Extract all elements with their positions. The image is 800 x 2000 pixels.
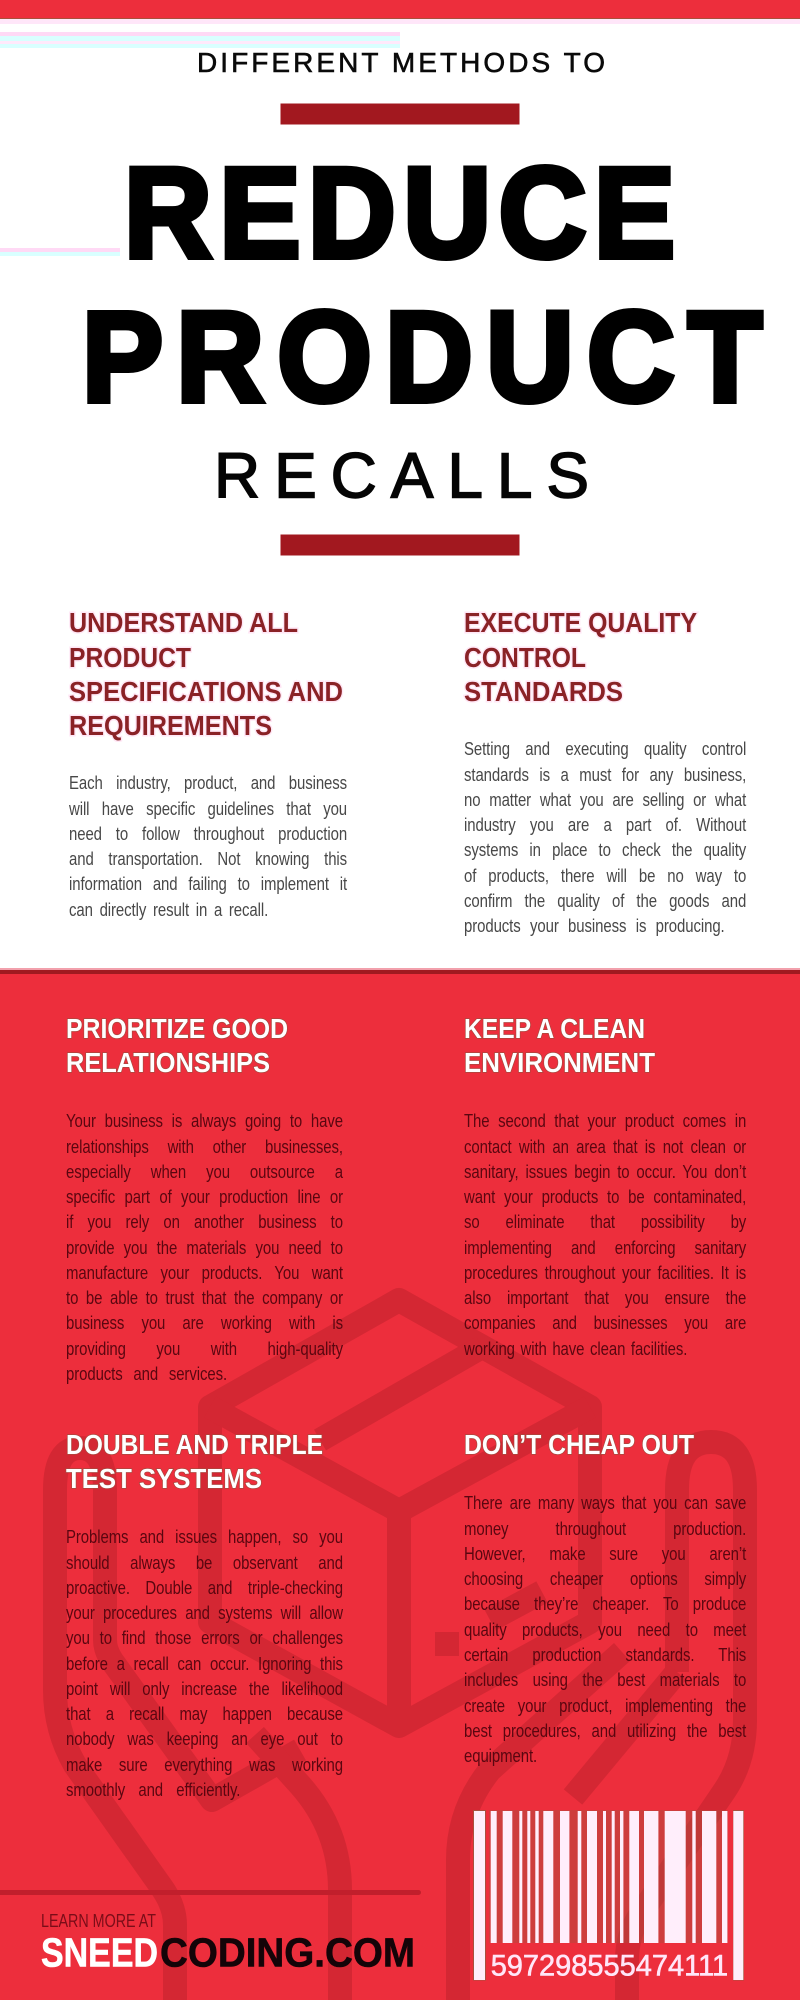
text block bbox=[66, 1527, 344, 1800]
text block: if you rely on another business to bbox=[66, 1212, 343, 1232]
title line: product: PRODUCT bbox=[82, 286, 762, 429]
panel: double and triple test systems bbox=[66, 1429, 344, 1800]
heading: DON’T CHEAP OUT bbox=[464, 1429, 694, 1460]
header artefact stripes bbox=[0, 32, 400, 256]
barcode number: 597298555474111 bbox=[491, 1950, 728, 1983]
text block: before a recall can occur. Ignoring this bbox=[66, 1654, 343, 1674]
heading bbox=[66, 1013, 288, 1078]
text block: There are many ways that you can save bbox=[464, 1493, 746, 1513]
panel: keep a clean environment bbox=[464, 1013, 746, 1359]
text block: provide you the materials you need to bbox=[66, 1238, 343, 1258]
section divider bbox=[0, 968, 800, 974]
text block: nobody was keeping an eye out to bbox=[66, 1729, 343, 1749]
top red band bbox=[0, 0, 800, 19]
heading: UNDERSTAND ALL bbox=[69, 607, 298, 638]
text block: can directly result in a recall. bbox=[69, 900, 268, 920]
text block: equipment. bbox=[464, 1746, 537, 1766]
text block: no matter what you are selling or what bbox=[464, 790, 746, 810]
heading: EXECUTE QUALITY bbox=[464, 607, 697, 638]
heading: RELATIONSHIPS bbox=[66, 1047, 270, 1078]
divider bottom bbox=[280, 534, 520, 556]
text block: make sure everything was working bbox=[66, 1755, 343, 1775]
heading: STANDARDS bbox=[464, 676, 623, 707]
text block bbox=[464, 739, 746, 936]
heading: REQUIREMENTS bbox=[69, 710, 272, 741]
heading: SPECIFICATIONS AND bbox=[69, 676, 343, 707]
text block: information and failing to implement it bbox=[69, 874, 347, 894]
text block: and transportation. Not knowing this bbox=[69, 849, 347, 869]
divider top bbox=[280, 104, 520, 124]
text block: need to follow throughout production bbox=[69, 824, 347, 844]
text block: create your product, implementing the bbox=[464, 1696, 746, 1716]
heading: DOUBLE AND TRIPLE bbox=[66, 1429, 323, 1460]
text block: Each industry, product, and business bbox=[69, 773, 347, 793]
text block: smoothly and efficiently. bbox=[66, 1780, 240, 1800]
text block: products and services. bbox=[66, 1364, 227, 1384]
text block: should always be observant and bbox=[66, 1553, 343, 1573]
text block: companies and businesses you are bbox=[464, 1313, 746, 1333]
footer: learn more bbox=[41, 1911, 415, 1976]
website: sneed: SNEED bbox=[41, 1930, 158, 1976]
heading: TEST SYSTEMS bbox=[66, 1463, 262, 1494]
panel: prioritize good relationships bbox=[66, 1013, 344, 1384]
text block: also important that you ensure the bbox=[464, 1288, 746, 1308]
text block: standards is a must for any business, bbox=[464, 765, 746, 785]
text block bbox=[69, 773, 348, 920]
text block: implementing and enforcing sanitary bbox=[464, 1238, 746, 1258]
text block bbox=[464, 1111, 746, 1359]
text block: working with have clean facilities. bbox=[464, 1339, 687, 1359]
text block: so eliminate that possibility by bbox=[464, 1212, 746, 1232]
text block: of products, there will be no way to bbox=[464, 866, 746, 886]
footer rule bbox=[0, 1890, 421, 1895]
heading bbox=[464, 1013, 656, 1078]
text block: you to find those errors or challenges bbox=[66, 1628, 343, 1648]
text block: want your products to be contaminated, bbox=[464, 1187, 746, 1207]
text block: Problems and issues happen, so you bbox=[66, 1527, 343, 1547]
text block: providing you with high-quality bbox=[66, 1339, 343, 1359]
text block: However, make sure you aren’t bbox=[464, 1544, 746, 1564]
heading: KEEP A CLEAN bbox=[464, 1013, 645, 1044]
title line: different methods to: DIFFERENT METHODS TO bbox=[197, 47, 605, 78]
text block: Setting and executing quality control bbox=[464, 739, 746, 759]
title line: recalls: RECALLS bbox=[214, 440, 589, 512]
text block: includes using the best materials to bbox=[464, 1670, 746, 1690]
text block: point will only increase the likelihood bbox=[66, 1679, 343, 1699]
panel: don't cheap out bbox=[464, 1429, 746, 1766]
text block: choosing cheaper options simply bbox=[464, 1569, 746, 1589]
text block: proactive. Double and triple-checking bbox=[66, 1578, 343, 1598]
text block: will have specific guidelines that you bbox=[69, 799, 347, 819]
text block: procedures throughout your facilities. It is bbox=[464, 1263, 746, 1283]
text block bbox=[464, 1493, 746, 1766]
text block: to be able to trust that the company or bbox=[66, 1288, 343, 1308]
heading: PRODUCT bbox=[69, 642, 191, 673]
text block: industry you are a part of. Without bbox=[464, 815, 746, 835]
text block: best procedures, and utilizing the best bbox=[464, 1721, 746, 1741]
text block: products your business is producing. bbox=[464, 916, 725, 936]
text block: systems in place to check the quality bbox=[464, 840, 746, 860]
red lower background bbox=[0, 974, 800, 2000]
learn more label: LEARN MORE AT bbox=[41, 1911, 156, 1931]
text block: confirm the quality of the goods and bbox=[464, 891, 746, 911]
text block: that a recall may happen because bbox=[66, 1704, 343, 1724]
text block: relationships with other businesses, bbox=[66, 1137, 343, 1157]
heading: CONTROL bbox=[464, 642, 586, 673]
heading bbox=[68, 607, 344, 742]
text block: your procedures and systems will allow bbox=[66, 1603, 343, 1623]
website: coding.com: CODING.COM bbox=[160, 1930, 415, 1976]
text block: The second that your product comes in bbox=[464, 1111, 746, 1131]
text block: money throughout production. bbox=[464, 1519, 746, 1539]
text block: manufacture your products. You want bbox=[66, 1263, 343, 1283]
text block: specific part of your production line or bbox=[66, 1187, 343, 1207]
title bbox=[82, 47, 764, 556]
heading: ENVIRONMENT bbox=[464, 1047, 655, 1078]
text block: business you are working with is bbox=[66, 1313, 343, 1333]
heading: PRIORITIZE GOOD bbox=[66, 1013, 288, 1044]
panel: execute quality control standards bbox=[463, 607, 746, 936]
title line: reduce: REDUCE bbox=[124, 142, 675, 285]
text block: contact with an area that is not clean or bbox=[464, 1137, 746, 1157]
text block: especially when you outsource a bbox=[66, 1162, 343, 1182]
text block: Your business is always going to have bbox=[66, 1111, 343, 1131]
text block: quality products, you need to meet bbox=[464, 1620, 746, 1640]
text block: because they’re cheaper. To produce bbox=[464, 1594, 746, 1614]
panel: understand all product specifications bbox=[68, 607, 348, 920]
text block bbox=[66, 1111, 344, 1384]
text block: sanitary, issues begin to occur. You don’t bbox=[464, 1162, 746, 1182]
heading bbox=[463, 607, 699, 707]
heading bbox=[66, 1429, 323, 1494]
text block: certain production standards. This bbox=[464, 1645, 746, 1665]
